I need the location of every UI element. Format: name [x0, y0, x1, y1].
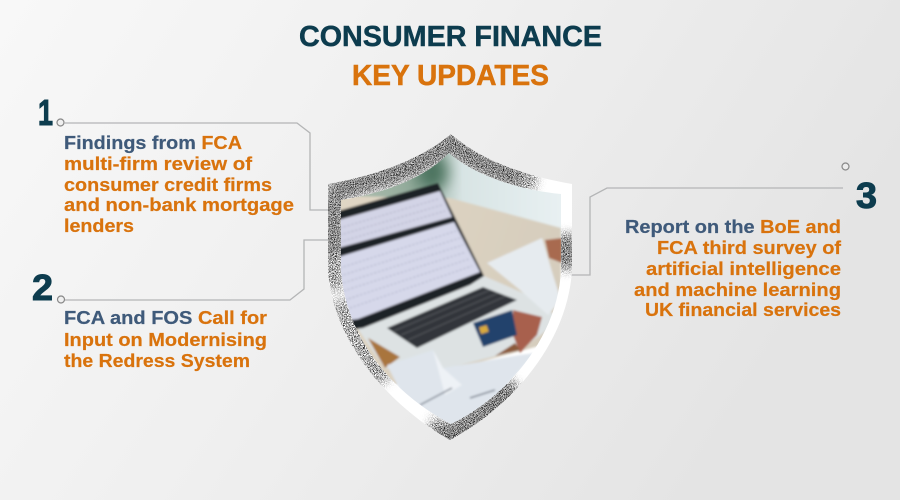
photo lower panel [335, 222, 480, 322]
photo wall [341, 153, 561, 236]
photo paper by hand [487, 238, 561, 315]
text 1: and non-bank mortgage [64, 195, 294, 215]
photo greenery [416, 152, 448, 192]
photo: laptop on desk [335, 148, 567, 430]
text 1 [64, 133, 294, 236]
text 2: Input on Modernising [64, 330, 267, 350]
photo wood sliver [495, 343, 520, 356]
text 3: UK financial services [645, 300, 841, 320]
text 3: artificial intelligence [646, 259, 841, 279]
photo lower hand [513, 310, 542, 353]
text 2: the Redress System [64, 351, 250, 371]
photo desk [340, 196, 561, 400]
connector 3 [570, 163, 849, 275]
text 1: lenders [64, 216, 134, 236]
shield grey wash [332, 142, 566, 436]
number 1: 1 [38, 92, 53, 133]
title: KEY UPDATES [352, 60, 549, 92]
photo credit card [473, 310, 517, 347]
connector 2 [58, 240, 331, 303]
shield grain texture [332, 142, 567, 438]
text 3: FCA third survey of [657, 238, 842, 258]
shield [328, 134, 572, 440]
text 3: and machine learning [634, 280, 841, 300]
photo wood shade [368, 338, 400, 368]
text 1: Findings from FCA [64, 133, 242, 153]
text 2 [64, 308, 267, 371]
shield frame [328, 134, 572, 440]
number 3: 3 [856, 175, 877, 216]
photo upper panel [335, 191, 452, 249]
photo keyboard [387, 287, 517, 348]
photo upper hand [545, 238, 562, 263]
title [299, 21, 602, 92]
photo papers [386, 352, 532, 424]
connector 1 [57, 119, 331, 210]
photo sheet rows [341, 232, 469, 308]
text 3: Report on the BoE and [625, 217, 841, 237]
callout 3 [570, 163, 877, 320]
text 2: FCA and FOS Call for [64, 308, 267, 328]
title: CONSUMER FINANCE [299, 21, 602, 53]
callout 2 [32, 240, 331, 371]
text 1: multi-firm review of [64, 154, 253, 174]
text 1: consumer credit firms [64, 175, 272, 195]
photo laptop base [358, 276, 552, 369]
callout 1 [38, 92, 331, 236]
number 2: 2 [32, 267, 53, 308]
text 3 [625, 217, 842, 320]
photo laptop screen frame [335, 183, 484, 332]
